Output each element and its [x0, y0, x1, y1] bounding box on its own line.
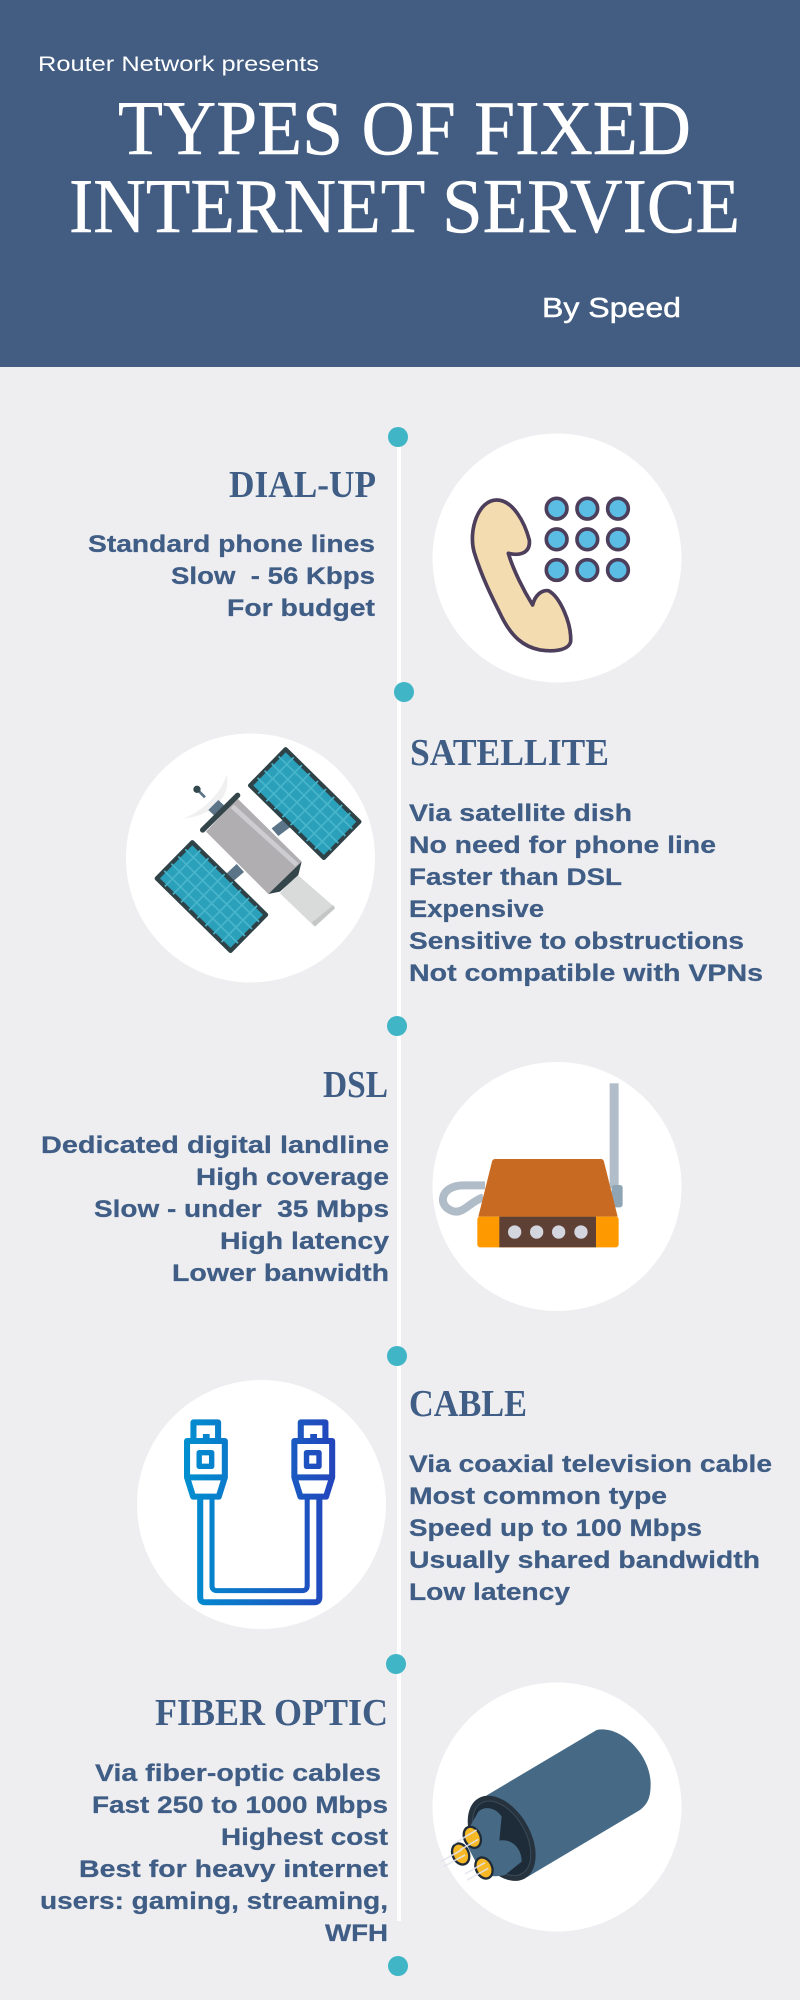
- panel: satellite: [126, 732, 763, 987]
- text: satellite details: Via satellite dish: [409, 800, 632, 827]
- text: satellite details: Sensitive to obstructions: [409, 928, 744, 955]
- text: satellite details: [409, 800, 763, 987]
- text: cable details: Speed up to 100 Mbps: [409, 1515, 702, 1542]
- heading: satellite: SATELLITE: [410, 732, 609, 774]
- text: dsl details: Dedicated digital landline: [41, 1132, 389, 1159]
- timeline: [386, 427, 414, 1976]
- panel: dial-up: [88, 434, 682, 682]
- title: INTERNET SERVICE: [69, 163, 740, 249]
- title: [69, 85, 740, 249]
- heading: dsl: DSL: [323, 1064, 388, 1106]
- icon: fiber optic cable: [432, 1682, 682, 1932]
- text: dsl details: High latency: [220, 1228, 390, 1255]
- text: cable details: [409, 1451, 772, 1606]
- text: satellite details: Faster than DSL: [409, 864, 622, 891]
- text: fiber optic details: users: gaming, streaming,: [40, 1888, 388, 1915]
- icon: ethernet cable: [137, 1380, 386, 1629]
- text: satellite details: Expensive: [409, 896, 544, 923]
- icon: satellite: [126, 734, 375, 982]
- panel: cable: [137, 1380, 772, 1629]
- text: fiber optic details: Best for heavy internet: [79, 1856, 388, 1883]
- text: fiber optic details: Via fiber-optic cables: [95, 1760, 381, 1787]
- text: dial-up details: For budget: [227, 595, 375, 622]
- subtitle: By Speed: [542, 292, 681, 323]
- text: fiber optic details: [40, 1760, 388, 1947]
- text: fiber optic details: WFH: [325, 1920, 388, 1947]
- panel: dsl: [41, 1062, 682, 1311]
- heading: dial-up: DIAL-UP: [229, 464, 376, 506]
- header banner: [0, 0, 800, 367]
- text: fiber optic details: Highest cost: [221, 1824, 388, 1851]
- text: fiber optic details: Fast 250 to 1000 Mbps: [92, 1792, 388, 1819]
- panel: fiber optic: [40, 1682, 682, 1947]
- icon: router: [432, 1062, 682, 1311]
- text: cable details: Via coaxial television cable: [409, 1451, 772, 1478]
- text: satellite details: Not compatible with VPNs: [409, 960, 763, 987]
- text: dial-up details: Standard phone lines: [88, 531, 375, 558]
- icon: telephone handset and keypad: [432, 434, 682, 682]
- text: satellite details: No need for phone line: [409, 832, 716, 859]
- heading: cable: CABLE: [409, 1383, 527, 1425]
- presenter line: Router Network presents: [38, 53, 319, 76]
- text: dsl details: Slow - under 35 Mbps: [94, 1196, 389, 1223]
- text: dsl details: Lower banwidth: [172, 1260, 389, 1287]
- text: dsl details: [41, 1132, 390, 1287]
- text: cable details: Low latency: [409, 1579, 571, 1606]
- text: cable details: Most common type: [409, 1483, 667, 1510]
- text: cable details: Usually shared bandwidth: [409, 1547, 760, 1574]
- text: dsl details: High coverage: [196, 1164, 389, 1191]
- heading: fiber optic: FIBER OPTIC: [155, 1692, 388, 1734]
- title: TYPES OF FIXED: [118, 85, 691, 171]
- text: dial-up details: [88, 531, 375, 622]
- text: dial-up details: Slow - 56 Kbps: [171, 563, 375, 590]
